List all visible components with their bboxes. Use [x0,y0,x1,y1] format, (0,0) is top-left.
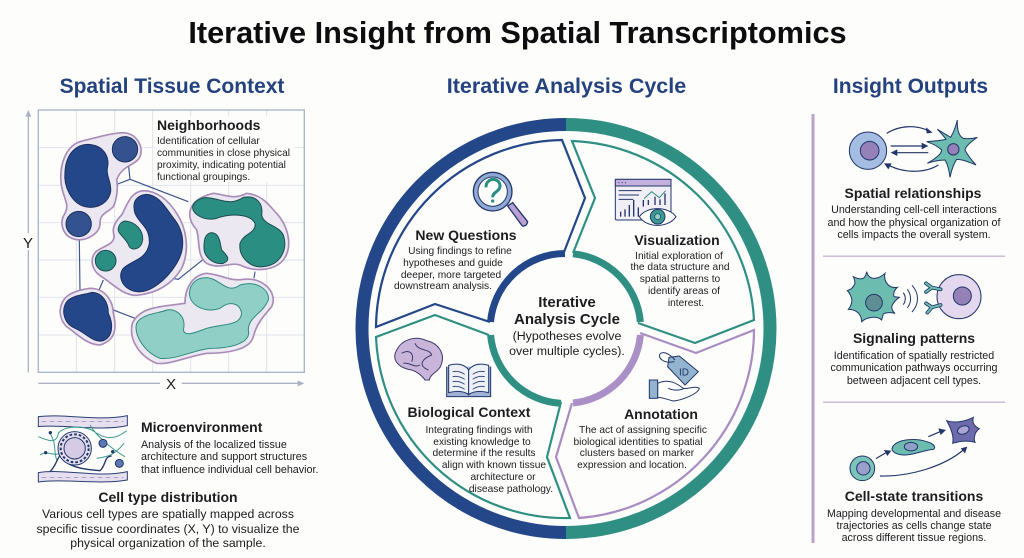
cluster: navy upper-left neighborhood [61,133,141,240]
panel: insight outputs [812,114,1005,544]
text block: cell type distribution: Cell type distribution [98,489,238,505]
text: cell-state transitions: Mapping developmental and disease [827,508,1001,520]
text block: neighborhoods: Identification of cellular [157,136,260,147]
text block: cell type distribution: physical organization of the sample. [70,536,266,550]
text block: cell type distribution [37,489,300,550]
text block: neighborhoods [38,110,304,372]
text: cycle centre [509,294,625,358]
axis: Y arrow [26,115,30,372]
text block: cell type distribution: Various cell types are spatially mapped across [42,507,294,521]
text: cycle centre: (Hypotheses evolve [513,329,622,343]
icon: brain [395,338,443,380]
text block: neighborhoods: proximity, indicating potential [157,160,286,171]
text: visualization: Visualization [634,232,720,248]
icon: spatial relationships [849,120,977,177]
text: cell-state transitions: trajectories as cells change state [836,520,992,532]
title: Iterative Insight from Spatial Transcriptomics [188,15,847,50]
segment: biological context [376,315,570,518]
text: annotation: The act of assigning specific [579,425,707,436]
text: spatial relationships: Spatial relationships [845,185,982,201]
cluster: teal right neighborhood [190,193,289,270]
icon: microenvironment [38,416,127,482]
heading: spatial tissue context: Spatial Tissue Context [60,75,284,98]
segment: visualization [572,141,754,343]
text: new questions: deeper, more targeted [401,270,501,281]
text: annotation: biological identities to spatial [573,437,703,448]
text: biological context: existing knowledge to [433,437,531,448]
icon: ID tag and hand: ID [679,367,689,378]
text: cell-state transitions [827,488,1001,544]
cluster: navy lower-left neighborhood [60,288,115,345]
text: biological context: align with known tissue [442,460,546,471]
text: signaling patterns: Identification of spatially restricted [834,350,994,362]
text: spatial relationships: and how the physical organization of [828,217,1000,229]
icon: signaling patterns [847,272,981,322]
text: biological context: determine if the results [432,448,536,459]
text: visualization: Initial exploration of [635,251,723,262]
text: annotation: expression and location. [577,460,687,471]
icon: magnifier question [473,172,528,226]
panel: iterative analysis cycle wheel [362,124,770,532]
text: signaling patterns: Signaling patterns [853,330,975,346]
text: visualization: the data structure and [630,262,730,273]
icon: ID tag and hand [649,353,699,401]
icon: visualization dashboard [615,179,676,225]
text: cycle centre: over multiple cycles). [509,344,625,358]
label: X axis: X [166,376,176,393]
text block: neighborhoods: functional groupings. [157,172,250,183]
icon: open book [447,364,491,397]
text: cell-state transitions: across different tissue regions. [842,532,986,544]
text: biological context: disease pathology. [469,484,553,495]
text: spatial relationships: cells impacts the overall system. [837,229,991,241]
text: signaling patterns: communication pathways occurring [831,362,998,374]
chart: connector lines [79,163,255,318]
text block: microenvironment [141,419,318,476]
cluster: mixed central neighborhood [92,191,186,295]
text: new questions: New Questions [415,227,517,243]
text block: cell type distribution: specific tissue coordinates (X, Y) to visualize the [37,522,300,536]
text block: microenvironment: that influence individual cell behavior. [141,464,318,476]
text block: microenvironment: Analysis of the localized tissue [141,439,287,451]
text: new questions [394,227,517,292]
text: visualization: identify areas of [648,286,720,297]
cluster: light teal lower neighborhood [132,273,273,364]
inner ring [490,254,640,403]
text: cycle centre: Iterative [538,294,596,311]
text: new questions: hypotheses and guide [403,258,503,269]
text: cycle centre: Analysis Cycle [514,311,620,328]
text: new questions: downstream analysis. [394,281,492,292]
text: annotation: clusters based on marker [580,448,695,459]
panel: spatial tissue map [23,110,304,393]
heading: insight outputs: Insight Outputs [833,75,988,98]
segment: annotation [556,330,754,518]
heading: iterative analysis cycle: Iterative Analysis Cycle [447,74,686,98]
segment: new questions [376,140,585,327]
icon: cell-state transitions [850,417,979,481]
text: spatial relationships [828,185,1000,241]
text: biological context: architecture or [470,472,536,483]
text block: microenvironment: architecture and support structures [141,451,307,463]
text: signaling patterns [831,330,998,387]
text: signaling patterns: between adjacent cell types. [847,375,981,387]
outer ring [362,124,770,532]
text: annotation [573,406,707,471]
label: Y axis: Y [23,235,33,252]
text: biological context [408,404,553,495]
text: new questions: Using findings to refine [408,246,512,257]
text: spatial relationships: Understanding cell-cell interactions [831,204,997,216]
text: biological context: Biological Context [408,404,531,420]
text: visualization: spatial patterns to [640,274,721,285]
text: cell-state transitions: Cell-state transitions [845,488,983,504]
text block: microenvironment: Microenvironment [141,419,263,435]
text: annotation: Annotation [624,406,698,422]
text: visualization: interest. [668,298,704,309]
text: visualization [630,232,730,309]
axis: X arrow [38,381,298,385]
text: biological context: Integrating findings with [425,425,533,436]
text block: neighborhoods: Neighborhoods [157,117,261,133]
text block: neighborhoods: communities in close physical [157,148,290,159]
